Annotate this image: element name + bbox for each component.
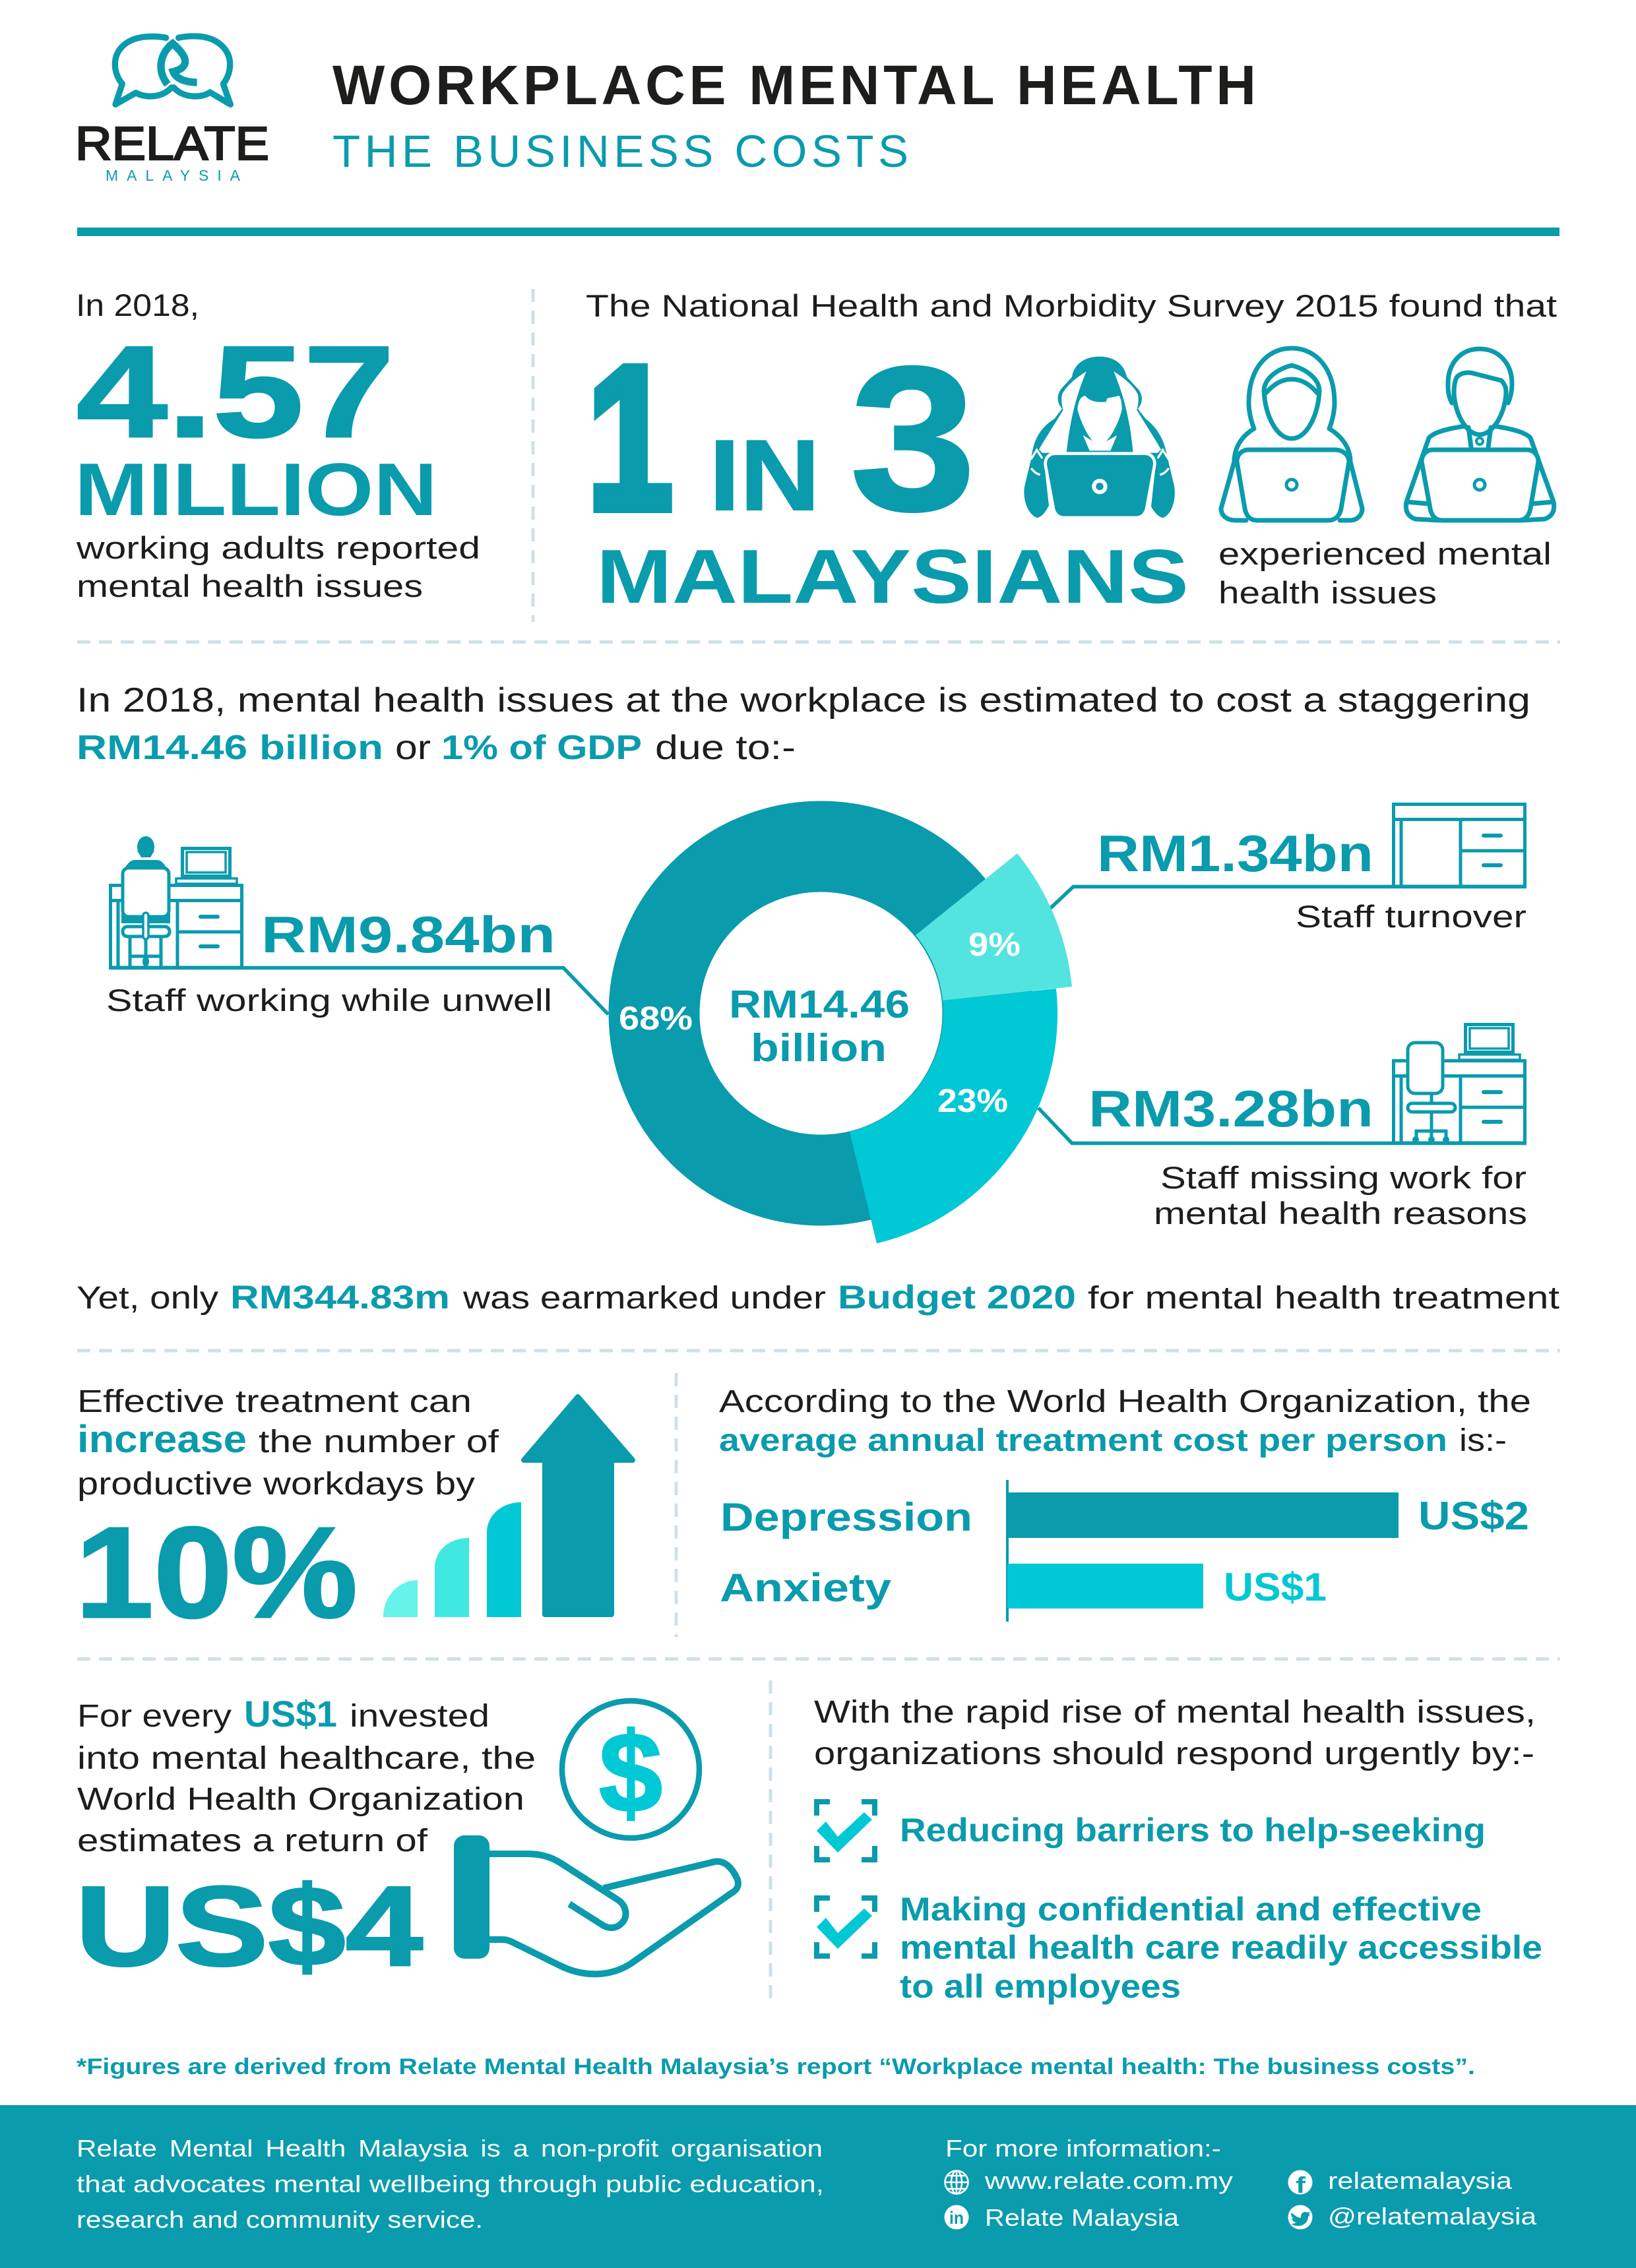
big unit: MILLION — [75, 448, 437, 531]
panel: recommendations — [814, 1695, 1542, 2005]
value: anxiety: US$1 — [1224, 1565, 1327, 1609]
intro text — [814, 1695, 1536, 1771]
icon: desk with chair and laptop — [1392, 1025, 1526, 1143]
centre total: RM14.46 — [729, 983, 910, 1026]
budget statement: Budget 2020 — [838, 1279, 1076, 1316]
budget statement: for mental health treatment — [1088, 1281, 1559, 1316]
text: For every — [77, 1699, 232, 1734]
recommendation 2: mental health care readily accessible — [900, 1929, 1542, 1966]
about text — [77, 2135, 824, 2233]
centre total: billion — [751, 1026, 887, 1070]
icon: open hand — [454, 1835, 738, 1974]
text: US$1 — [244, 1693, 337, 1734]
title line 1: WORKPLACE MENTAL HEALTH — [332, 54, 1256, 116]
percent labels — [619, 926, 1021, 1119]
description: health issues — [1218, 575, 1437, 610]
label: mental health reasons — [1154, 1196, 1527, 1231]
icon: twitter — [1288, 2205, 1313, 2229]
intro text: cost statement: In 2018, mental health issues at the workplace is estimated to cost a staggering — [77, 681, 1530, 720]
big amount: US$4 — [75, 1863, 423, 1990]
footer band — [0, 2105, 1636, 2268]
twitter handle: @relatemalaysia — [1328, 2203, 1537, 2230]
panel: treatment cost — [719, 1384, 1531, 1622]
text — [77, 1693, 536, 1858]
icon: globe — [945, 2170, 968, 2194]
recommendation 2: Making confidential and effective — [900, 1891, 1482, 1928]
icon: man with laptop — [1406, 349, 1554, 520]
facebook name: relatemalaysia — [1328, 2167, 1513, 2194]
text: According to the World Health Organization, the — [719, 1384, 1531, 1419]
icon: worker at desk — [109, 836, 243, 967]
text: productive workdays by — [77, 1467, 475, 1502]
bar: anxiety — [1007, 1564, 1203, 1609]
logo: Relate Malaysia — [75, 36, 269, 184]
text: World Health Organization — [77, 1782, 524, 1817]
MALAYSIANS: MALAYSIANS — [596, 534, 1189, 619]
icon: linkedin: in — [949, 2208, 964, 2228]
leader line — [1038, 1108, 1526, 1144]
amount: RM1.34bn — [1097, 824, 1373, 882]
contact heading: For more information:- — [945, 2135, 1221, 2162]
percent labels: 23% — [937, 1082, 1008, 1119]
segment: 9% — [916, 853, 1072, 1000]
big number: 10% — [75, 1500, 358, 1645]
recommendation 2: to all employees — [900, 1968, 1181, 2005]
icon: rising bars and arrow — [383, 1397, 633, 1617]
panel: productive workdays — [75, 1384, 633, 1645]
logo subtitle: MALAYSIA — [106, 167, 241, 184]
callout: staff working while unwell — [106, 836, 608, 1018]
budget statement: was earmarked under — [462, 1281, 826, 1316]
intro text: With the rapid rise of mental health issues, — [814, 1695, 1536, 1730]
about text: that advocates mental wellbeing through public education, — [77, 2170, 824, 2197]
value: depression: US$2 — [1418, 1494, 1529, 1538]
logo wordmark: RELATE — [75, 118, 269, 170]
IN: IN — [709, 419, 820, 532]
intro text: cost statement: 1% of GDP — [441, 729, 642, 767]
icon: facebook: f — [1296, 2173, 1306, 2198]
intro text: cost statement: RM14.46 billion — [77, 729, 383, 767]
lead text: In 2018, — [76, 288, 199, 322]
budget statement: RM344.83m — [230, 1279, 450, 1316]
text: average annual treatment cost per person — [719, 1423, 1447, 1458]
description: working adults reported — [76, 530, 480, 565]
big 1: 1 — [587, 323, 673, 552]
about text: research and community service. — [77, 2206, 483, 2233]
text: invested — [350, 1699, 489, 1734]
text: the number of — [259, 1425, 499, 1459]
centre total — [729, 983, 910, 1070]
percent labels: 9% — [968, 926, 1021, 963]
footnote: *Figures are derived from Relate Mental Health Malaysia’s report “Workplace mental health: The business costs”. — [77, 2054, 1475, 2079]
icon: facebook — [1288, 2170, 1313, 2198]
panel: 1 in 3 Malaysians — [586, 288, 1557, 619]
description — [1218, 536, 1552, 610]
text: is:- — [1459, 1423, 1507, 1458]
label: Staff missing work for — [1160, 1160, 1526, 1195]
icon: dollar coin — [562, 1701, 699, 1838]
text: into mental healthcare, the — [77, 1741, 536, 1776]
label — [1154, 1160, 1527, 1231]
intro text: organizations should respond urgently by:- — [814, 1736, 1534, 1771]
icon: woman with laptop — [1024, 357, 1175, 518]
budget statement: Yet, only — [77, 1281, 218, 1316]
description — [76, 530, 480, 603]
icon: speech bubbles — [115, 36, 230, 104]
icon: check 2 — [817, 1898, 875, 1956]
segment: 23% — [850, 989, 1057, 1244]
text — [719, 1384, 1531, 1458]
percent labels: 68% — [619, 1000, 693, 1037]
text: increase — [77, 1418, 247, 1461]
callout: staff turnover — [1046, 805, 1526, 934]
header rule — [77, 228, 1559, 236]
leader line — [109, 968, 608, 1014]
text: Effective treatment can — [77, 1384, 472, 1419]
icon: check 1 — [817, 1802, 875, 1860]
segment: 68% — [654, 847, 988, 1180]
leader line — [1046, 886, 1526, 913]
bar chart — [720, 1480, 1529, 1622]
linkedin name: Relate Malaysia — [985, 2204, 1180, 2231]
big number: 4.57 — [77, 319, 394, 464]
callout: staff missing work — [1038, 1025, 1527, 1231]
donut chart — [619, 847, 1072, 1244]
survey text: The National Health and Morbidity Survey 2015 found that — [586, 288, 1557, 323]
bar: depression — [1007, 1492, 1399, 1538]
amount: RM9.84bn — [261, 905, 555, 964]
recommendation 1: Reducing barriers to help-seeking — [900, 1812, 1486, 1849]
description: mental health issues — [77, 568, 423, 603]
icon: desk — [1392, 805, 1526, 886]
title — [332, 54, 1256, 177]
description: experienced mental — [1218, 536, 1552, 571]
intro text: cost statement — [77, 681, 1530, 767]
about text: Relate Mental Health Malaysia is a non-profit organisation — [77, 2135, 823, 2162]
panel: 4.57 million — [75, 288, 480, 603]
label: depression: Depression — [720, 1495, 972, 1539]
intro text: cost statement: due to:- — [655, 729, 796, 767]
recommendation 2 — [900, 1891, 1542, 2005]
big 3: 3 — [850, 324, 976, 554]
text: estimates a return of — [77, 1824, 428, 1858]
website: www.relate.com.my — [984, 2167, 1233, 2194]
intro text: cost statement: or — [395, 729, 431, 767]
panel: return on investment — [75, 1693, 738, 1990]
amount: RM3.28bn — [1088, 1080, 1373, 1138]
icon: woman in hijab with laptop — [1221, 348, 1362, 520]
icon: linkedin — [945, 2205, 968, 2229]
text — [77, 1384, 499, 1502]
label: Staff working while unwell — [106, 983, 552, 1018]
budget statement — [77, 1279, 1559, 1316]
label: anxiety: Anxiety — [720, 1566, 892, 1610]
label: Staff turnover — [1296, 899, 1526, 934]
axis — [1006, 1480, 1009, 1622]
title line 2: THE BUSINESS COSTS — [332, 126, 908, 177]
icon: dollar coin: $ — [599, 1709, 662, 1836]
